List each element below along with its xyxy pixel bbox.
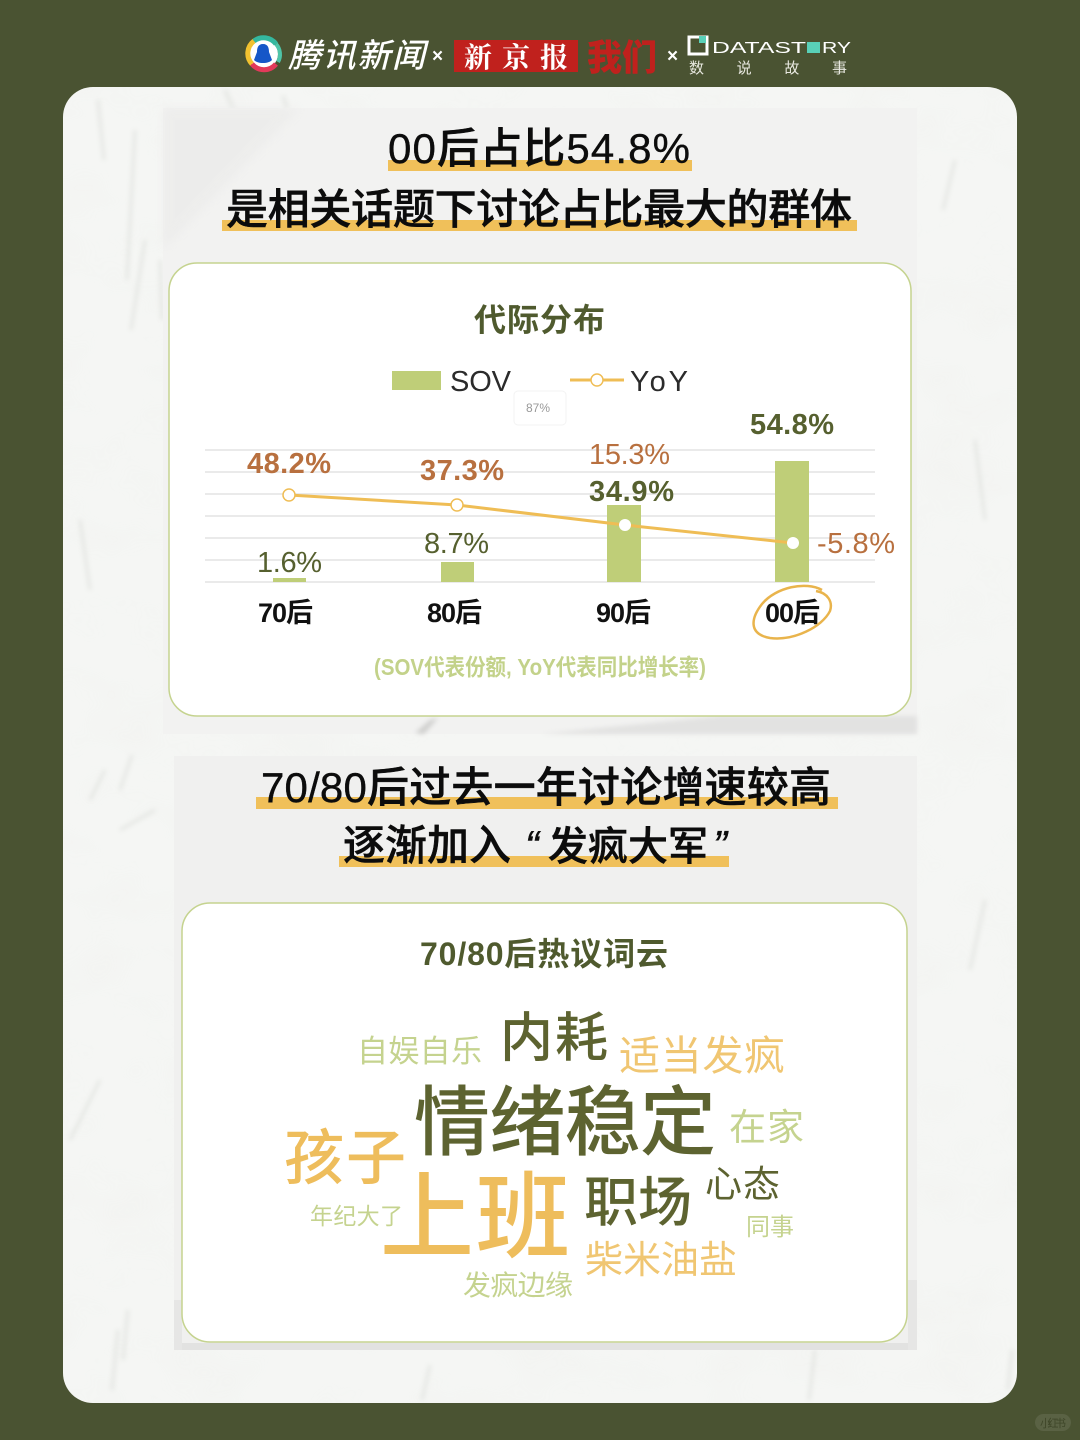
logo: Datastory: 数 说 故 事 (689, 60, 847, 77)
legend (392, 366, 688, 398)
heading: top title: 是相关话题下讨论占比最大的群体 (226, 186, 852, 233)
logo: Beijing News (454, 36, 657, 78)
word cloud: 年纪大了 (310, 1203, 403, 1229)
watermark badge: 87% (526, 401, 550, 415)
logo: Datastory: RY (822, 40, 851, 57)
word cloud: 心态 (705, 1164, 780, 1205)
word cloud: 孩子 (284, 1125, 406, 1192)
panel: generation distribution (169, 263, 911, 716)
word cloud: 发疯边缘 (463, 1270, 573, 1301)
axis labels: 90后 (596, 598, 651, 628)
YoY labels: -5.8% (817, 528, 895, 560)
axis labels: 00后 (765, 598, 820, 628)
logo: Beijing News: 新京报 (464, 36, 568, 76)
heading: second title: 逐渐加入 (343, 822, 511, 869)
word cloud title: 70/80后热议词云 (420, 936, 668, 972)
logo: Beijing News: 我们 (587, 37, 657, 78)
word cloud: 上班 (380, 1165, 570, 1270)
logo: Datastory (689, 36, 851, 77)
word cloud: 自娱自乐 (357, 1034, 482, 1069)
heading: top title: 00后占比54.8% (388, 125, 690, 172)
legend: SOV (450, 366, 512, 398)
word cloud: 职场 (584, 1173, 692, 1233)
YoY labels: 15.3% (589, 439, 670, 471)
heading: second title: ” (713, 822, 729, 869)
watermark badge (514, 391, 566, 425)
grid lines (205, 450, 875, 582)
word cloud: 内耗 (500, 1009, 608, 1068)
SOV labels: 34.9% (589, 476, 674, 508)
YoY labels: 48.2% (247, 448, 331, 480)
panel: word cloud (182, 903, 907, 1342)
SOV labels: 54.8% (750, 409, 834, 441)
watermark: Xiaohongshu: 小红书 (1040, 1417, 1066, 1430)
word cloud: 柴米油盐 (585, 1240, 737, 1282)
heading: second title: “ (525, 822, 541, 869)
SOV labels: 1.6% (257, 547, 322, 579)
watermark: Xiaohongshu (1035, 1414, 1071, 1431)
line: YoY (283, 489, 799, 549)
logo: Datastory: DATAST (712, 40, 806, 57)
YoY labels: 37.3% (420, 455, 504, 487)
chart title: 代际分布 (474, 302, 605, 338)
heading: second title: 70/80后过去一年讨论增速较高 (261, 764, 831, 811)
separator: × (667, 46, 678, 67)
bars: SOV (273, 461, 809, 582)
YoY labels (247, 439, 895, 560)
word cloud: 情绪稳定 (414, 1081, 716, 1166)
word cloud: 同事 (746, 1214, 794, 1241)
SOV labels: 8.7% (424, 528, 489, 560)
SOV labels (257, 409, 834, 579)
note: (SOV代表份额, YoY代表同比增长率) (374, 654, 706, 680)
legend: YoY (630, 366, 688, 398)
word cloud (284, 1009, 804, 1301)
separator: × (432, 46, 443, 67)
header logos (248, 36, 851, 78)
axis labels: 70后 (258, 598, 313, 628)
axis labels: 80后 (427, 598, 482, 628)
logo: Tencent News: 腾讯新闻 (288, 37, 430, 74)
heading: second title (256, 764, 838, 869)
heading: second title: 发疯大军 (548, 825, 708, 869)
highlight circle (754, 586, 831, 638)
word cloud: 在家 (729, 1107, 804, 1148)
axis labels (258, 598, 820, 628)
heading: top title (222, 125, 857, 233)
word cloud: 适当发疯 (619, 1033, 785, 1079)
